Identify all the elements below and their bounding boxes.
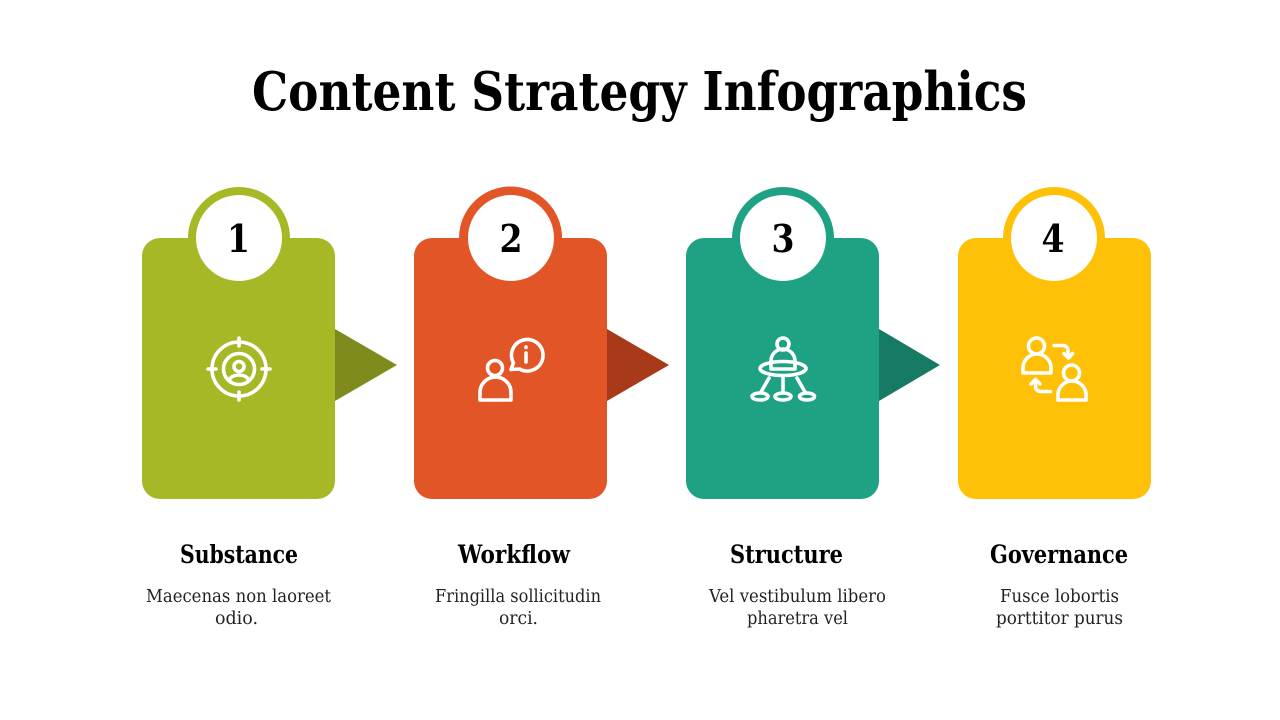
card: step 4 — [958, 187, 1151, 499]
number badge 2: 2 — [500, 216, 522, 261]
card: step 1 — [142, 187, 335, 499]
text: Governance description: porttitor purus — [996, 609, 1123, 629]
panel: step 3 structure — [686, 187, 940, 629]
text: Substance description: odio. — [215, 609, 258, 629]
text: Structure description: Vel vestibulum libero — [708, 587, 886, 607]
text: Structure description: pharetra vel — [747, 609, 848, 629]
number badge 4 — [1011, 195, 1097, 281]
heading: Substance: Substance — [180, 540, 298, 569]
card: step 2 — [414, 186, 607, 499]
panel: step 2 workflow — [414, 186, 669, 629]
text: Governance description — [996, 587, 1123, 629]
text: Substance description — [146, 587, 331, 629]
text: Workflow description: orci. — [499, 609, 538, 629]
icon: target person — [208, 338, 270, 400]
icon: network person — [752, 338, 814, 400]
arrow: step 1 to 2 — [335, 329, 397, 401]
icon: people exchange — [1023, 338, 1086, 400]
text: Workflow description — [435, 587, 601, 629]
number badge 3: 3 — [772, 216, 794, 261]
card: step 3 — [686, 187, 879, 499]
panel: step 1 substance — [142, 187, 397, 629]
arrow: step 3 to 4 — [879, 329, 940, 401]
arrow: step 2 to 3 — [607, 329, 669, 401]
text: Substance description: Maecenas non laoreet — [146, 587, 331, 607]
number badge 4: 4 — [1042, 216, 1064, 261]
number badge 1: 1 — [227, 216, 250, 261]
panel: step 4 governance — [958, 187, 1151, 629]
number badge 1 — [196, 195, 282, 281]
text: Governance description: Fusce lobortis — [1000, 587, 1119, 607]
number badge 3 — [740, 195, 826, 281]
number badge 2 — [468, 195, 554, 281]
text: Structure description — [708, 587, 886, 629]
text: Workflow description: Fringilla sollicitudin — [435, 587, 601, 607]
icon: person with info bubble — [480, 339, 543, 400]
heading: Workflow: Workflow — [457, 540, 571, 569]
heading: Structure: Structure — [730, 540, 843, 569]
title: Content Strategy Infographics — [252, 61, 1027, 123]
heading: Governance: Governance — [990, 540, 1128, 569]
